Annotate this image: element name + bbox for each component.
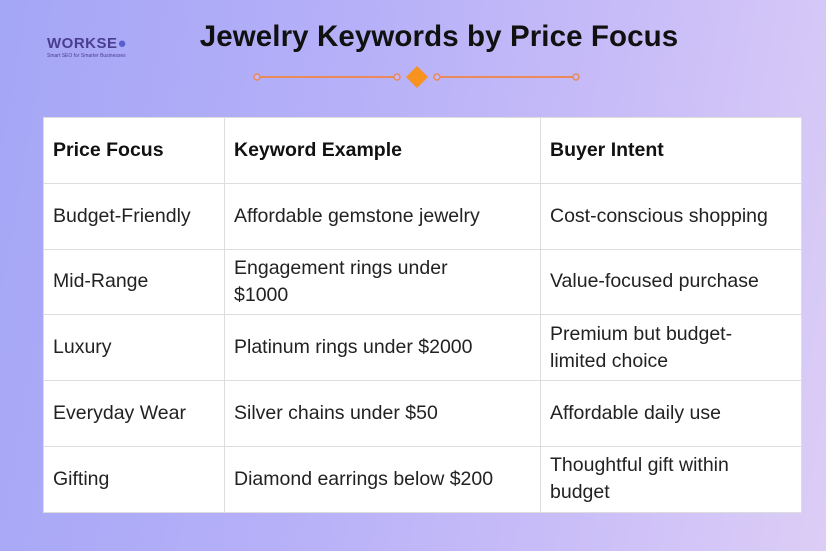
table: Price Focus (53, 139, 164, 161)
logo: WORKSE● (47, 35, 127, 52)
logo: Smart SEO for Smarter Businesses (47, 53, 126, 59)
divider ornament (253, 66, 580, 88)
table: Luxury (53, 336, 112, 358)
table: Platinum rings under $2000 (234, 336, 472, 358)
table: limited choice (550, 350, 668, 372)
table: $1000 (234, 284, 288, 306)
table: Buyer Intent (550, 139, 664, 161)
table: Everyday Wear (53, 402, 186, 424)
table: Mid-Range (53, 270, 148, 292)
table: Keyword Example (234, 139, 402, 161)
table: budget (550, 481, 610, 503)
title: Jewelry Keywords by Price Focus (200, 20, 678, 53)
table: Premium but budget- (550, 323, 732, 345)
table: Silver chains under $50 (234, 402, 438, 424)
table: Gifting (53, 468, 109, 490)
table: Value-focused purchase (550, 270, 759, 292)
table: Budget-Friendly (53, 205, 191, 227)
table: Cost-conscious shopping (550, 205, 768, 227)
table: Affordable daily use (550, 402, 721, 424)
table (43, 117, 802, 513)
table: Engagement rings under (234, 257, 448, 279)
table: Affordable gemstone jewelry (234, 205, 480, 227)
table: Diamond earrings below $200 (234, 468, 493, 490)
table: Thoughtful gift within (550, 454, 729, 476)
